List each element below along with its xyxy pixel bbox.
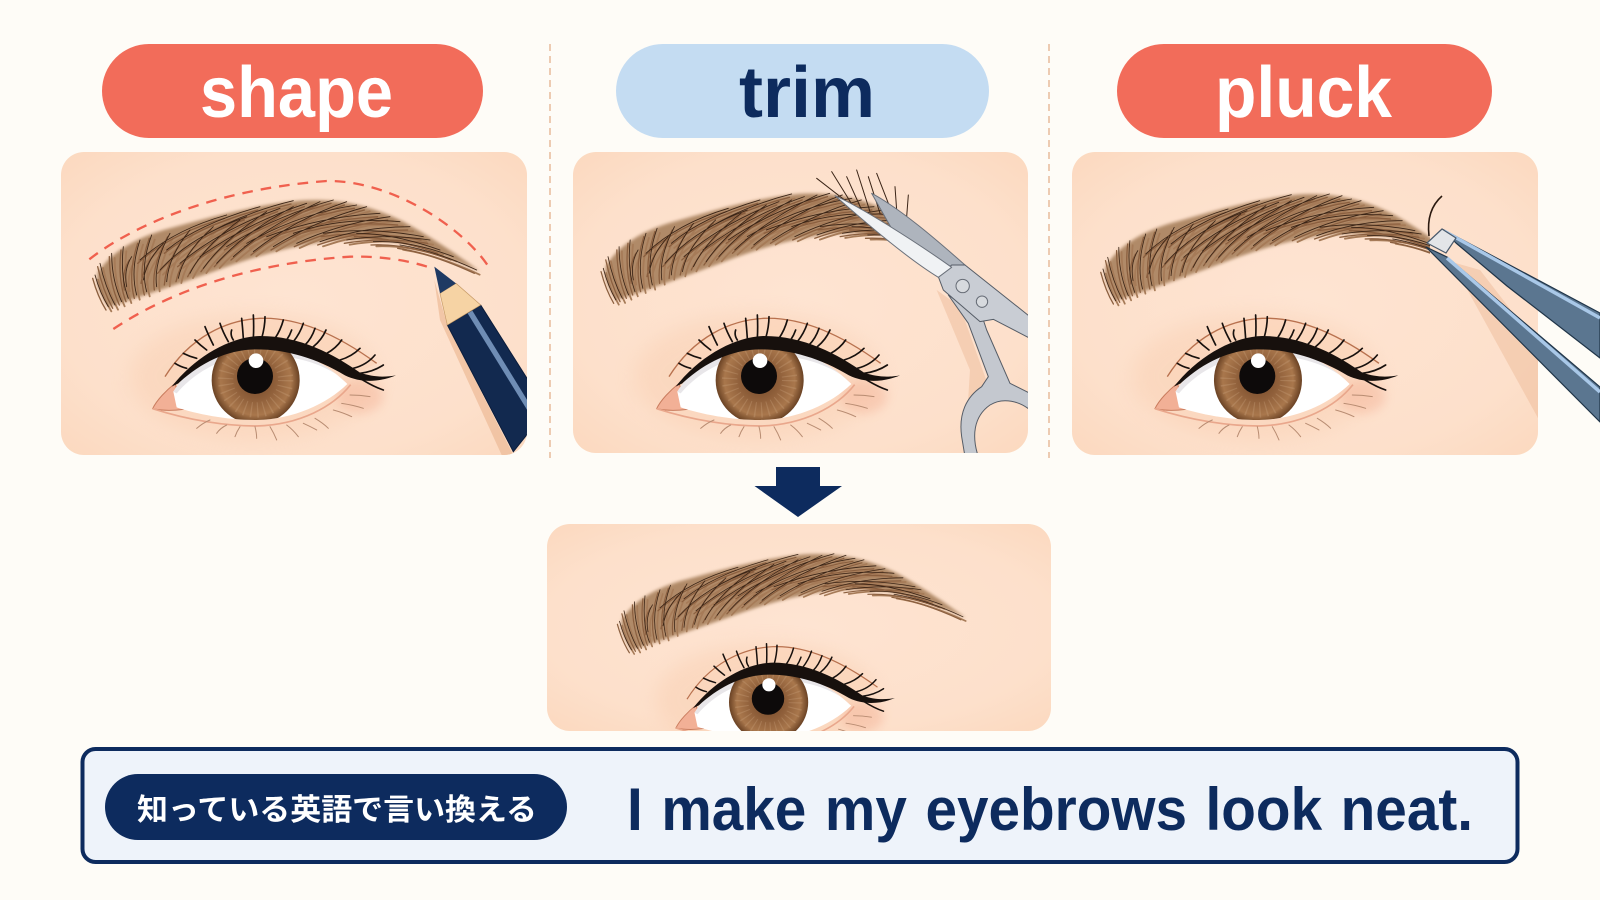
plucked hair: [1429, 196, 1442, 236]
panel: result illustration: [547, 524, 1051, 731]
arrow pointing down: [754, 467, 842, 517]
icon: eye: [1132, 313, 1398, 440]
stray hairs being cut: [817, 170, 908, 217]
eyebrow: [600, 192, 890, 306]
panel: shape illustration: [61, 152, 533, 455]
bottom sentence bar: [82, 749, 1518, 862]
eyebrow: [1101, 194, 1469, 305]
panel: trim illustration: [573, 152, 1030, 457]
example sentence: I make my eyebrows look neat.: [627, 776, 1473, 843]
heading pill: shape: shape: [200, 53, 393, 133]
heading pill: pluck: pluck: [1215, 53, 1393, 133]
badge: Japanese label: [105, 774, 567, 840]
tweezers shadow: [1452, 262, 1538, 418]
heading pill: trim: trim: [739, 53, 875, 133]
icon: scissors: [835, 193, 1030, 457]
heading pill: trim: [616, 44, 989, 138]
icon: eye: [130, 313, 396, 440]
dashed guide lines: [89, 181, 491, 329]
vertical dashed divider left: [549, 44, 551, 458]
eyebrow: [617, 554, 966, 654]
panel: pluck illustration: [1072, 152, 1600, 455]
heading pill: pluck: [1117, 44, 1492, 138]
icon: tweezers: [1426, 229, 1600, 422]
icon: eye: [660, 643, 895, 731]
heading pill: shape: [102, 44, 483, 138]
vertical dashed divider right: [1048, 44, 1050, 458]
icon: pencil: [434, 267, 533, 455]
badge: Japanese label: 知っている英語で言い換える: [137, 794, 537, 827]
eyebrow: [93, 200, 480, 311]
icon: eye: [634, 313, 900, 440]
